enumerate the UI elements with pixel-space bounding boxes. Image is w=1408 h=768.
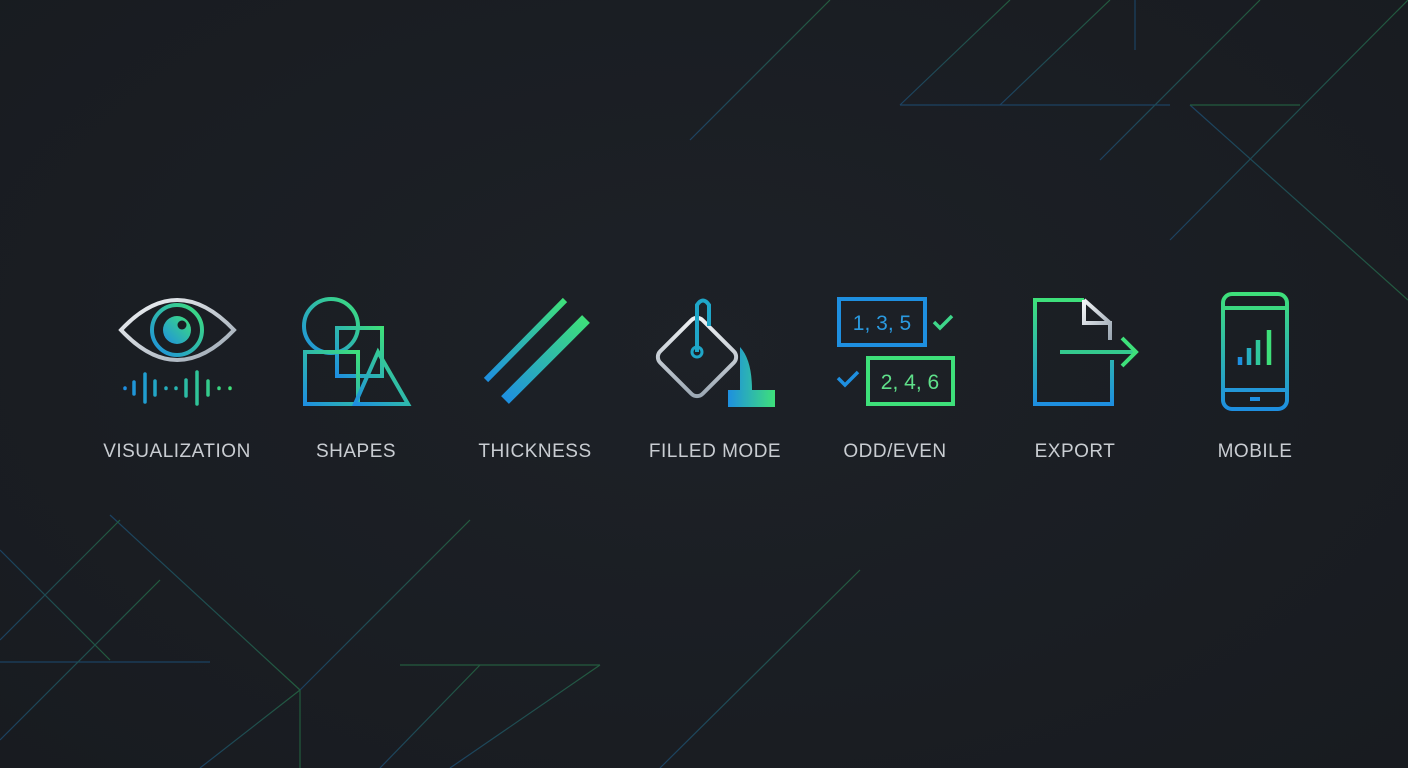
label: filled mode: FILLED MODE	[649, 441, 781, 462]
icon: odd/even: 1, 3, 5	[853, 312, 911, 335]
label: thickness: THICKNESS	[478, 441, 592, 462]
label: odd/even: ODD/EVEN	[843, 441, 947, 462]
label: visualization: VISUALIZATION	[103, 441, 251, 462]
label: shapes: SHAPES	[316, 441, 396, 462]
icon: odd/even: 2, 4, 6	[881, 371, 939, 394]
label: mobile: MOBILE	[1218, 441, 1292, 462]
label: export: EXPORT	[1035, 441, 1115, 462]
